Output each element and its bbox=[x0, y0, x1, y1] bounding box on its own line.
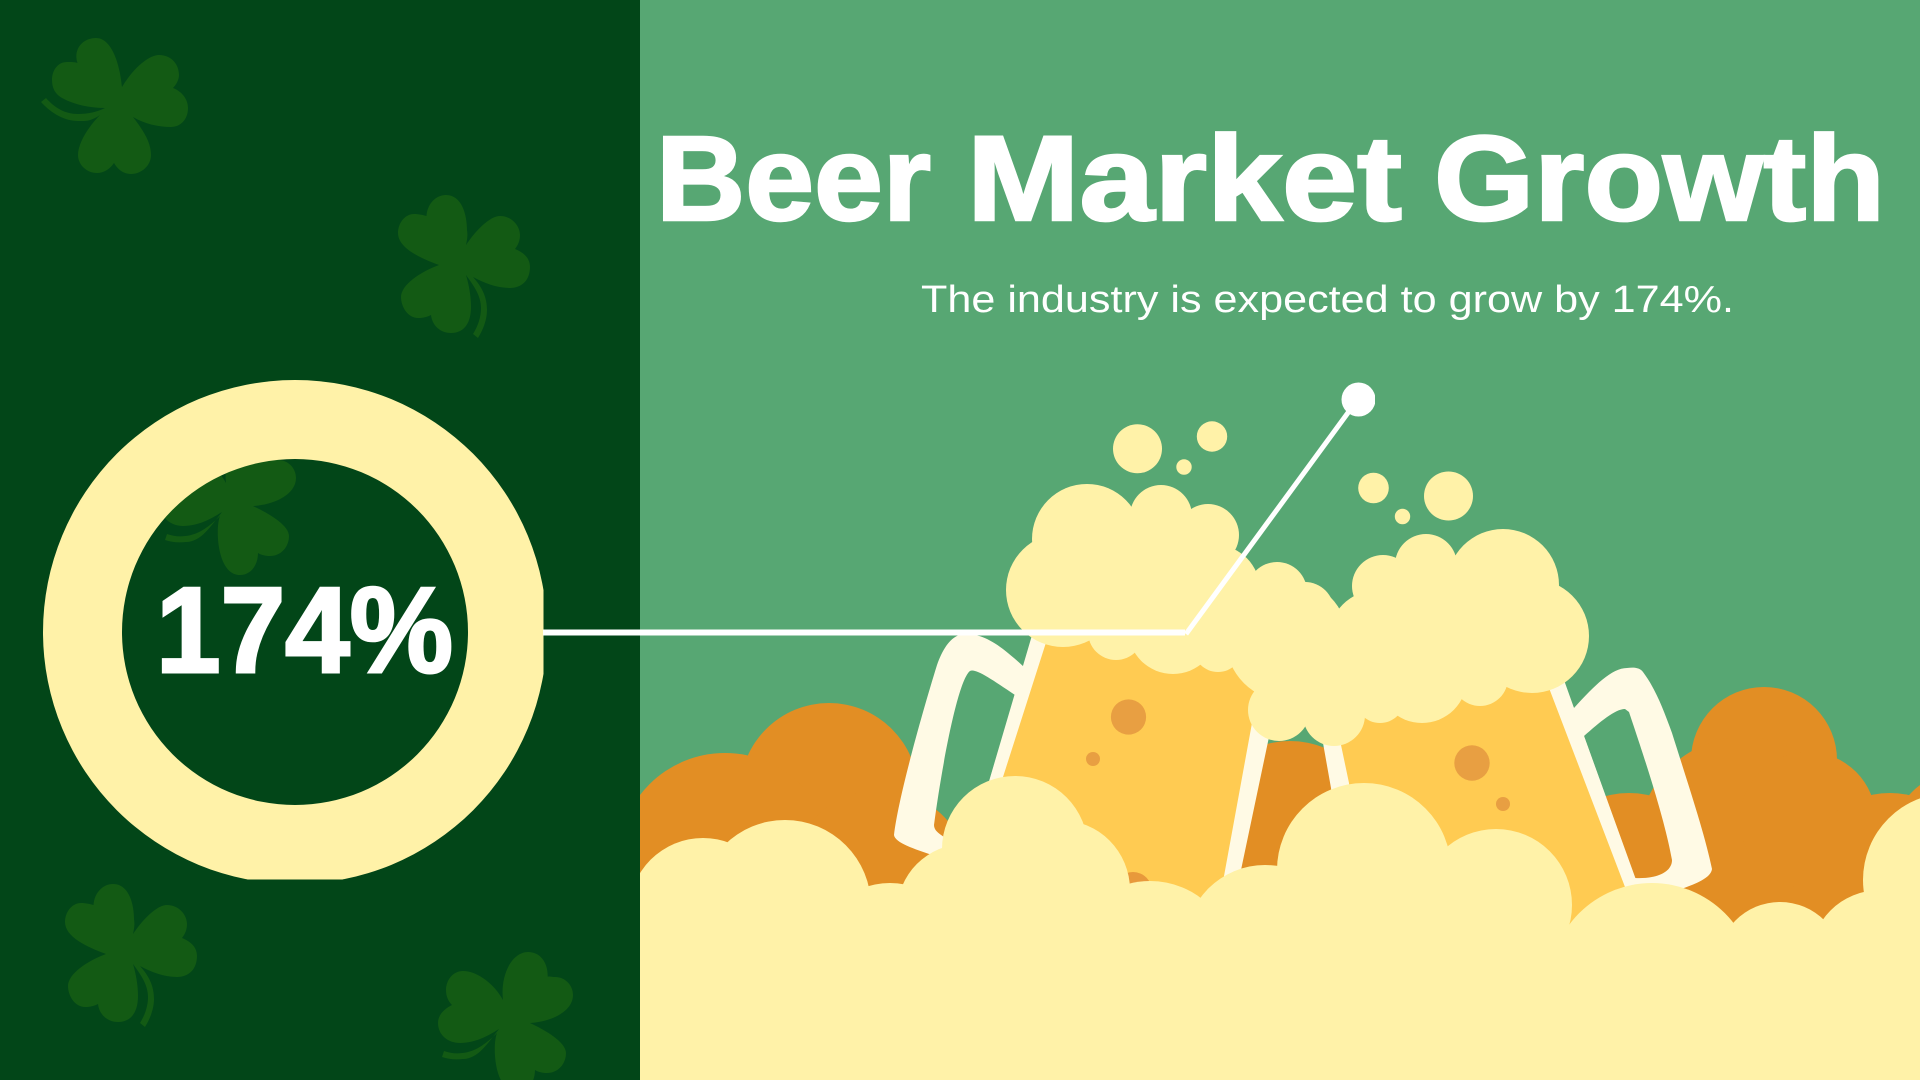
subtitle: The industry is expected to grow by 174%. bbox=[921, 279, 1734, 321]
right mug glass bbox=[1320, 660, 1640, 950]
illustration: right beer mug bbox=[1320, 660, 1712, 950]
title: Beer bbox=[656, 110, 931, 246]
chart: cream progress ring bbox=[43, 380, 547, 884]
icon: shamrock inside ring bbox=[165, 460, 296, 575]
panel: right green background bbox=[640, 0, 1920, 1080]
left mug beer bubble small bbox=[1086, 752, 1100, 766]
left mug low bubble bbox=[1114, 872, 1152, 910]
scene: orange background clouds bbox=[640, 687, 1920, 923]
illustration: left beer mug bbox=[894, 600, 1275, 950]
left mug beer bubble large bbox=[1111, 699, 1146, 735]
icon: shamrock bottom left bbox=[65, 884, 197, 1027]
illustration: floating foam bubbles bbox=[1113, 421, 1473, 524]
icon: shamrock top left bbox=[41, 38, 188, 174]
title: Market bbox=[967, 110, 1402, 246]
icon: shamrock bottom right bbox=[438, 952, 573, 1080]
icon: shamrock top right bbox=[398, 195, 530, 338]
illustration: cream foam clouds at bottom bbox=[629, 776, 1920, 1080]
left mug glass bbox=[975, 600, 1275, 950]
rising line connector with end dot bbox=[543, 382, 1376, 636]
horizontal line from ring bbox=[543, 630, 1185, 636]
illustration: foam on left mug bbox=[1006, 484, 1370, 741]
right mug handle bbox=[1560, 668, 1712, 900]
big number: 174%: 174% bbox=[156, 562, 453, 698]
right mug beer bubble small bbox=[1496, 797, 1510, 811]
left mug handle bbox=[894, 634, 1040, 880]
title: Growth bbox=[1434, 110, 1885, 246]
right mug beer bubble large bbox=[1454, 745, 1490, 781]
line end dot bbox=[1342, 382, 1376, 416]
panel: left dark green with shamrocks bbox=[0, 0, 640, 1080]
diagonal line bbox=[1186, 410, 1350, 634]
illustration: foam on right mug bbox=[1301, 529, 1589, 746]
left mug beer bbox=[985, 610, 1258, 950]
right mug beer bbox=[1338, 660, 1630, 950]
